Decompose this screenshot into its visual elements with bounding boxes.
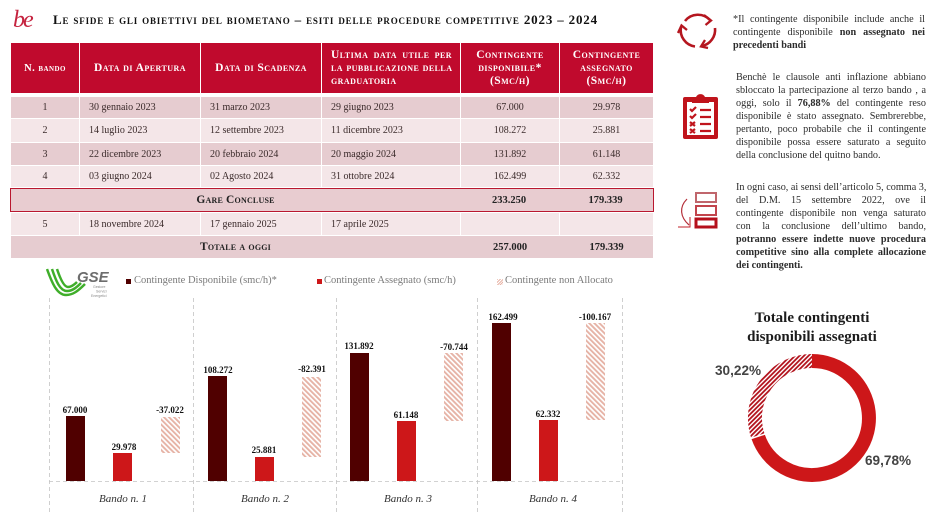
row: bando 1: 1 — [42, 102, 48, 113]
logo: GSE: Servizi — [96, 290, 107, 294]
row: bando 3: 61.148 — [593, 148, 620, 160]
text: ai sensi dell'articolo 5: potranno essere indette nuove procedura — [736, 234, 926, 245]
text: ai sensi dell'articolo 5: competitive sino alla complete allocazione — [736, 247, 926, 258]
group: bando 1: Bando n. 1 — [99, 493, 147, 505]
row: bando 5: 17 gennaio 2025 — [210, 218, 277, 230]
row: bando 4: 4 — [42, 171, 48, 182]
table header row: disponibile* — [478, 62, 542, 74]
icon: cycle arrows — [677, 14, 716, 50]
row: gare concluse: 233.250 — [492, 194, 526, 206]
row: bando 4: 62.332 — [593, 171, 620, 182]
group: bando 1: 29.978 — [112, 442, 137, 452]
row: gare concluse: 179.339 — [588, 194, 623, 206]
row: bando 1: 29.978 — [593, 102, 620, 113]
row: bando 2 — [11, 119, 653, 142]
table header row: Data di Scadenza — [215, 62, 307, 74]
group: bando 1: 67.000 — [63, 405, 88, 415]
label: 69,78%: 69,78% — [865, 453, 911, 468]
text: clausole anti inflazione — [736, 72, 926, 161]
note: contingente disponibile: *Il contingente disponibile include anche il — [733, 14, 925, 25]
group: bando 2: 108.272 — [203, 365, 233, 375]
icon: clipboard checklist — [683, 94, 718, 139]
table header row: Data di Apertura — [94, 62, 186, 74]
row: bando 3: 131.892 — [494, 148, 526, 160]
label: 30,22%: 30,22% — [715, 363, 761, 378]
table header row: N. bando — [24, 62, 66, 74]
note: contingente disponibile: precedenti bandi — [733, 40, 806, 51]
group: bando 4: 62.332 — [536, 409, 561, 419]
row: bando 1: 67.000 — [496, 102, 524, 113]
donut title: Totale contingenti — [755, 310, 869, 326]
row: totale a oggi: 179.339 — [589, 242, 624, 252]
logo: GSE: Energetici — [91, 294, 107, 298]
table header row: la pubblicazione della — [331, 62, 452, 74]
row: bando 2: 25.881 — [593, 125, 620, 136]
row: bando 2: 11 dicembre 2023 — [331, 125, 403, 136]
table header row — [11, 43, 653, 93]
group: bando 2: -82.391 — [298, 364, 326, 374]
text: clausole anti inflazione: Benchè le clausole anti inflazione abbiano — [736, 72, 926, 83]
group: bando 4: Bando n. 4 — [529, 493, 577, 505]
legend: disponibile: Contingente Disponibile (smc/h)* — [134, 275, 277, 286]
row: bando 3: 20 febbraio 2024 — [210, 148, 278, 160]
group: bando 3: -70.744 — [440, 342, 468, 352]
group: bando 2 — [203, 364, 326, 505]
row: bando 5 — [11, 213, 653, 235]
logo: GSE: GSE — [77, 269, 110, 286]
segment: assegnato — [758, 361, 869, 475]
row: bando 3: 20 maggio 2024 — [331, 148, 396, 160]
logo: GSE: Gestore — [93, 285, 106, 289]
group: bando 2: 25.881 — [252, 445, 277, 455]
text: ai sensi dell'articolo 5: contingente disponibile non venga saturato — [736, 208, 926, 219]
group: bando 1: -37.022 — [156, 405, 184, 415]
icon: stacked boxes with curved arrow — [678, 192, 718, 228]
row: bando 5: 18 novembre 2024 — [89, 218, 164, 230]
row: bando 2: 12 settembre 2023 — [210, 125, 284, 136]
table header row: graduatoria — [331, 74, 397, 86]
row: totale a oggi: Totale a oggi — [200, 241, 271, 253]
note: contingente disponibile: contingente disponibile non assegnato nei — [733, 27, 925, 38]
text: clausole anti inflazione: oggi, solo il 76,88% del contingente reso — [736, 98, 926, 109]
logo: GSE — [46, 268, 110, 298]
title: Le sfide e gli obiettivi del biometano – esiti delle procedure competitive 2023 – 2024 — [53, 12, 598, 27]
row: bando 3 — [11, 143, 653, 165]
table: esiti delle procedure — [10, 43, 654, 258]
row: bando 1: 29 giugno 2023 — [331, 102, 394, 113]
row: gare concluse: Gare Concluse — [196, 194, 275, 206]
text: ai sensi dell'articolo 5: dei contingenti. — [736, 260, 803, 271]
text: ai sensi dell'articolo 5 — [736, 182, 926, 271]
group: bando 1 — [63, 405, 184, 505]
logo: be: be — [13, 7, 32, 33]
legend: non allocato: Contingente non Allocato — [505, 275, 613, 286]
table header row: (Smc/h) — [587, 74, 626, 86]
row: bando 3: 22 dicembre 2023 — [89, 148, 161, 160]
group: bando 2: Bando n. 2 — [241, 493, 289, 505]
row: bando 2: 108.272 — [494, 125, 526, 136]
row: totale a oggi: 257.000 — [493, 242, 527, 252]
table header row: assegnato — [580, 62, 633, 74]
text: clausole anti inflazione: della conclusione del quitno bando. — [736, 150, 881, 161]
bar chart: bandi — [49, 298, 623, 512]
table header row: Contingente — [573, 48, 640, 60]
row: bando 4: 31 ottobre 2024 — [331, 171, 394, 182]
row: bando 1 — [11, 97, 653, 118]
donut chart — [715, 354, 911, 482]
group: bando 4: -100.167 — [579, 312, 612, 322]
row: bando 1: 30 gennaio 2023 — [89, 102, 156, 113]
row: totale a oggi — [11, 236, 653, 258]
chart legend — [126, 275, 613, 286]
row: gare concluse — [10, 188, 654, 212]
group: bando 4: 162.499 — [488, 312, 518, 322]
text: clausole anti inflazione: disponibile possa essere saturato a seguito — [736, 137, 926, 148]
row: bando 2: 14 luglio 2023 — [89, 125, 147, 136]
note: contingente disponibile — [733, 14, 925, 51]
row: bando 2: 2 — [42, 125, 48, 136]
table header row: Contingente — [476, 48, 544, 60]
legend: assegnato: Contingente Assegnato (smc/h) — [324, 275, 456, 286]
donut title — [747, 310, 877, 345]
group: bando 3: 61.148 — [394, 410, 419, 420]
text: clausole anti inflazione: pertanto, poco probabile che il contingente — [736, 124, 926, 135]
group: bando 3: 131.892 — [344, 341, 374, 351]
text: clausole anti inflazione: sbloccato la partecipazione al terzo bando , a — [736, 85, 926, 96]
row: bando 5: 17 aprile 2025 — [331, 218, 389, 230]
table header row: Ultima data utile per — [331, 48, 452, 60]
group: bando 3: Bando n. 3 — [384, 493, 432, 505]
row: bando 3: 3 — [42, 148, 48, 160]
text: clausole anti inflazione: disponibile è stato assegnato. Sembrerebbe, — [736, 111, 926, 122]
row: bando 4 — [11, 166, 653, 187]
table header row: (Smc/h) — [490, 74, 530, 86]
row: bando 5: 5 — [42, 218, 48, 230]
row: bando 4: 02 Agosto 2024 — [210, 171, 273, 182]
group: bando 4 — [488, 312, 612, 505]
row: bando 4: 03 giugno 2024 — [89, 171, 152, 182]
row: bando 1: 31 marzo 2023 — [210, 102, 270, 113]
row: bando 4: 162.499 — [494, 171, 526, 182]
group: bando 3 — [344, 341, 468, 505]
donut title: disponibili assegnati — [747, 329, 877, 345]
segment: non assegnato — [755, 361, 812, 436]
text: ai sensi dell'articolo 5: con la conclusione dell’ultimo bando, — [736, 221, 926, 232]
text: ai sensi dell'articolo 5: del D.M. 15 settembre 2022, ove il — [736, 195, 926, 206]
text: ai sensi dell'articolo 5: In ogni caso, ai sensi dell’articolo 5, comma 3, — [736, 182, 926, 193]
